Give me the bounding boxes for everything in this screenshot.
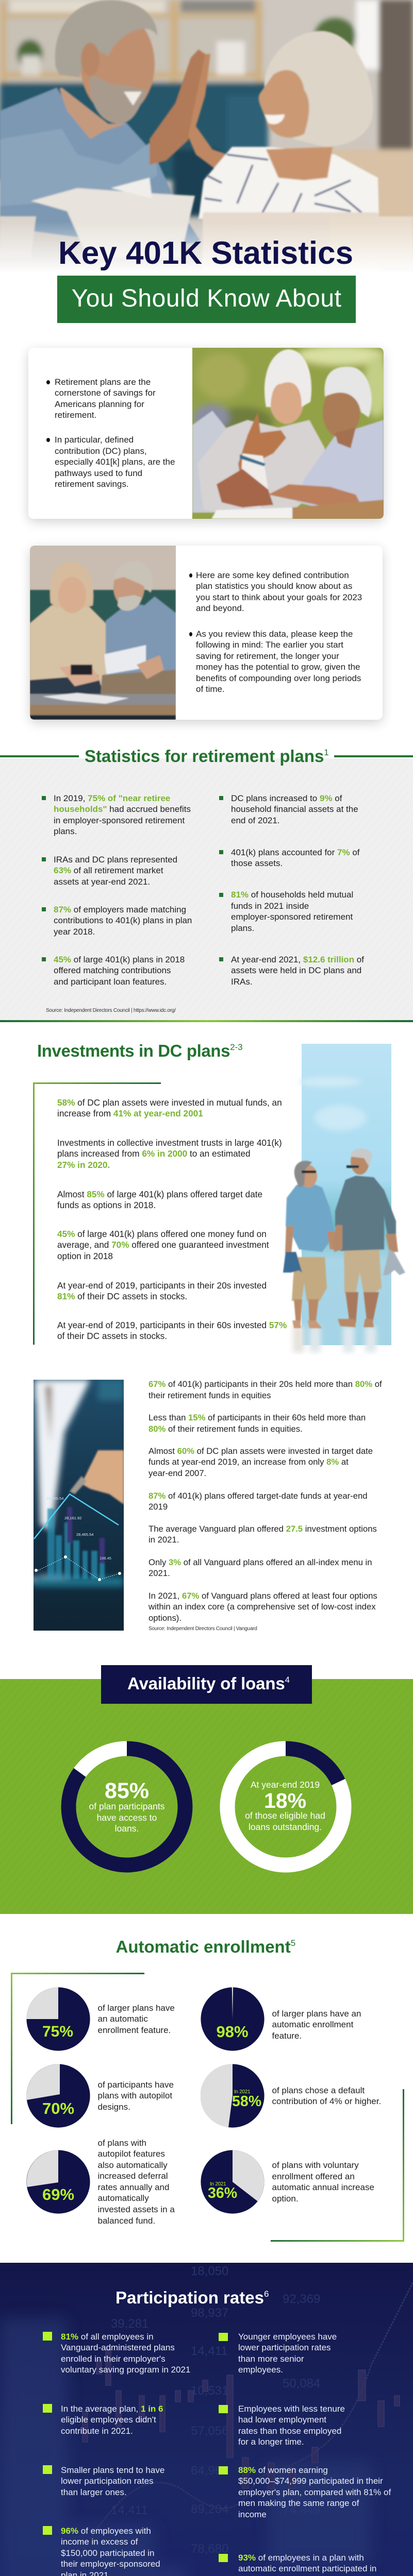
stat: participants in 20s equities: their retirement funds in equities [148, 1391, 271, 1400]
bullet text: keep in mind: of time. [196, 684, 225, 694]
callout: 18 percent had loans outstanding: of those eligible had [245, 1810, 325, 1821]
stat: younger employees: lower participation rates [238, 2343, 331, 2352]
stat: target date funds: Almost 85% of large 401(k) plans offered target date [57, 1189, 262, 1199]
stat: participants in 20s [57, 1280, 267, 1301]
stat: 96 percent high income: 96% of employees with [61, 2526, 151, 2536]
stat: 96 percent high income: their employer-sponsored [61, 2559, 160, 2569]
stat: 36 percent pie [200, 2150, 394, 2214]
stat: collective investment trusts [57, 1138, 282, 1170]
section heading: Automatic enrollment5 [115, 1937, 295, 1956]
callout: 85 percent have access: loans. [115, 1823, 139, 1834]
background: dark finance chart with couple photo: 74,849 [283, 2503, 320, 2517]
bracket decoration: bottom right [271, 2089, 404, 2242]
callout: 85 percent have access: of plan participants [89, 1801, 164, 1811]
section: investments in DC plans [33, 1041, 406, 1354]
stat: 36 percent pie: 36% [208, 2185, 237, 2201]
section heading: Investments in DC plans2-3 [37, 1041, 243, 1060]
stat: 1 in 6: eligible employees didn't [61, 2415, 156, 2425]
stat: 98 percent pie: 98% [216, 2023, 249, 2041]
stat: 98 percent pie: of larger plans have an [272, 2008, 361, 2019]
stat: target date funds: funds as options in 2018. [57, 1200, 156, 1210]
stat: collective investment trusts: Investments in collective investment trusts in large 401(k) [57, 1138, 282, 1148]
stat: 58 percent pie: In 2021 [234, 2089, 250, 2095]
background: dark finance chart with couple photo: 57,056 [191, 2424, 228, 2438]
stat: index core: options). [148, 1613, 181, 1623]
stat: 1 in 6: In the average plan, 1 in 6 [61, 2404, 163, 2413]
stat: household assets [219, 793, 358, 825]
stat: target date assets: Almost 60% of DC plan assets were invested in target date [148, 1446, 373, 1456]
stat: 96 percent high income: $150,000 participated in [61, 2548, 154, 2558]
stat: all-index menu: Only 3% of all Vanguard plans offered an all-index menu in [148, 1557, 372, 1567]
stat: younger employees: employees. [238, 2365, 283, 2375]
stat: participants in 60s: At year-end of 2019, participants in their 60s invested 57% [57, 1320, 287, 1330]
hero: photo, title and subtitle [0, 0, 413, 323]
stat: 93 percent automatic enrollment: 93% of employees in a plan with [238, 2552, 364, 2563]
stat: 93 percent automatic enrollment: automatic enrollment participated in [238, 2564, 376, 2573]
section: automatic enrollment [0, 1937, 413, 2244]
bullet text: defined contribution: retirement savings. [55, 479, 129, 489]
photo: hand drawing financial chart: 28,465.54 [76, 1532, 93, 1537]
stat: 69 percent pie: 69% [42, 2185, 74, 2204]
stat: 70 percent pie: of participants have [98, 2079, 174, 2090]
callout: 85 percent have access: 85% [105, 1778, 149, 1803]
stat: collective investment trusts: plans increased from 6% in 2000 to an estimated [57, 1148, 251, 1159]
stat: smaller plans: Smaller plans tend to have [61, 2465, 164, 2475]
background: dark finance chart with couple photo [0, 2263, 413, 2576]
section heading banner [101, 1665, 312, 1704]
photo: hand drawing financial chart [34, 1380, 124, 1631]
stat: 69 percent pie: also automatically [98, 2160, 168, 2170]
stat: 75 percent pie: 75% [42, 2023, 73, 2040]
stat: participants in 60s equities [148, 1413, 366, 1434]
woman's hand and arm [188, 54, 242, 178]
bullet text: keep in mind: following in mind: The earlier you start [196, 640, 343, 650]
stat: 69 percent pie: autopilot features [98, 2149, 165, 2159]
stat: 69 percent pie: invested assets in a [98, 2205, 175, 2214]
bullet text: defined contribution: In particular, defined [55, 435, 134, 445]
callout: 85 percent have access [89, 1778, 164, 1834]
stat: younger employees [238, 2331, 337, 2376]
background: dark finance chart with couple photo: 78,680 [191, 2542, 228, 2556]
photo: couple walking on beach [283, 1044, 406, 1354]
stat: 81 percent enrolled: Vanguard-administered plans [61, 2343, 175, 2352]
stat: 12.6 trillion: At year-end 2021, $12.6 trillion of [231, 954, 364, 964]
stat: 70 percent pie: plans with autopilot [98, 2091, 172, 2100]
stat: smaller plans: lower participation rates [61, 2476, 154, 2486]
stat: 81 percent enrolled: voluntary saving program in 2021 [61, 2365, 190, 2375]
stat: 75 percent pie: an automatic [98, 2014, 148, 2024]
stat: 12.6 trillion: IRAs. [231, 977, 253, 987]
stat: money fund: 45% of large 401(k) plans offered one money fund on [57, 1228, 267, 1239]
stat: 88 percent women: men making the same range of [238, 2498, 359, 2508]
woman [199, 147, 379, 219]
stat: target date funds [57, 1189, 262, 1210]
stat: 69 percent pie: automatically [98, 2193, 149, 2203]
bullet text: key plan statistics: plan statistics you should know about as [196, 581, 352, 591]
bullet text: key plan statistics: and beyond. [196, 603, 244, 613]
photo: couple with dog [192, 348, 384, 519]
stat: 69 percent pie: increased deferral [98, 2171, 168, 2181]
stat: 81 percent enrolled: enrolled in their employer's [61, 2354, 166, 2364]
photo: hand drawing financial chart: 198.45 [100, 1556, 111, 1561]
stat: mutual funds [219, 890, 353, 933]
stat: money fund: average, and 70% offered one guaranteed investment [57, 1240, 269, 1250]
source note: Source: Independent Directors Council | https://www.idc.org/ [46, 1008, 176, 1013]
bullet text: defined contribution [46, 435, 175, 489]
stat: younger employees: than more senior [238, 2354, 304, 2364]
stat: 401k share: 401(k) plans accounted for 7% of [231, 847, 360, 857]
bullet text: defined contribution: contribution (DC) plans, [55, 446, 147, 456]
stat: 58 percent pie: of plans chose a default [272, 2086, 365, 2095]
stat: target-date funds offered: 87% of 401(k) plans offered target-date funds at year-end [148, 1491, 368, 1500]
background: dark finance chart with couple photo: 89,204 [191, 2502, 228, 2516]
stat: less tenure: rates than those employed [238, 2426, 341, 2436]
bullet text: key plan statistics [189, 570, 362, 613]
background: dark finance chart with couple photo: 39,281 [111, 2317, 148, 2331]
stat: average Vanguard options [148, 1524, 377, 1545]
stat: less tenure: had lower employment [238, 2415, 326, 2425]
section heading banner: Availability of loans4 [127, 1674, 290, 1693]
stat: 69 percent pie [26, 2137, 176, 2227]
photo: hand drawing financial chart: 28,161.92 [64, 1516, 81, 1520]
callout: 18 percent had loans outstanding: loans outstanding. [249, 1822, 322, 1832]
stat: matching contributions: 87% of employers made matching [54, 905, 186, 914]
stat: 88 percent women: $50,000–$74,999 participated in their [238, 2476, 383, 2486]
stat: younger employees: Younger employees have [238, 2332, 337, 2341]
background: dark finance chart with couple photo: 98,937 [191, 2306, 228, 2320]
section: participation rates [0, 2263, 413, 2576]
stat: 75 percent pie: enrollment feature. [98, 2025, 171, 2035]
stat: target-date funds offered: 2019 [148, 1502, 168, 1512]
stat: 401k share: those assets. [231, 858, 283, 868]
stat: large plans [42, 954, 185, 987]
stat: 69 percent pie: balanced fund. [98, 2216, 155, 2226]
stat: mutual funds: 81% of households held mutual [231, 890, 353, 900]
stat: 36 percent pie: option. [272, 2194, 299, 2204]
stat: 1 in 6: contribute in 2021. [61, 2426, 133, 2436]
stat: large plans: offered matching contributions [54, 965, 171, 975]
callout: 18 percent had loans outstanding: 18% [264, 1789, 306, 1812]
stat: matching contributions [42, 905, 192, 937]
bullet text: defined contribution: especially 401[k] plans, are the [55, 457, 175, 467]
stat: smaller plans: than larger ones. [61, 2487, 127, 2497]
stat: near retiree households: in employer-sponsored retirement [54, 816, 185, 825]
stat: mutual funds: increase from 41% at year-end 2001 [57, 1108, 203, 1118]
stat: 36 percent pie: enrollment offered an [272, 2172, 355, 2181]
panel: intro card with couple reviewing documents [30, 546, 383, 720]
stat: participants in 20s: 81% of their DC assets in stocks. [57, 1291, 187, 1301]
stat: 12.6 trillion: assets were held in DC plans and [231, 965, 361, 975]
background: dark finance chart with couple photo: 14,411 [111, 2503, 148, 2517]
stat: 96 percent high income: income in excess of [61, 2537, 138, 2547]
stat: near retiree households: households" had accrued benefits [54, 804, 191, 814]
bullet text: retirement plans: retirement. [55, 410, 96, 420]
stat: 58 percent pie: contribution of 4% or higher. [272, 2096, 381, 2106]
bullet text: keep in mind: saving for retirement, the longer your [196, 651, 339, 661]
stat: 69 percent pie: of plans with [98, 2138, 146, 2147]
bullet text: keep in mind: benefits of compounding over long periods [196, 673, 361, 683]
stat: mutual funds: 58% of DC plan assets were invested in mutual funds, an [57, 1097, 282, 1108]
stat: large plans: and participant loan features. [54, 977, 167, 987]
stat: IRAs and DC plans: IRAs and DC plans represented [54, 854, 177, 865]
photo: hand drawing financial chart: 26,465.54 [46, 1496, 63, 1501]
background: dark finance chart with couple photo: 14,411 [191, 2344, 228, 2358]
man [0, 88, 201, 247]
laptop [203, 212, 379, 274]
stat: 88 percent women [238, 2465, 391, 2520]
stat: less tenure: for a longer time. [238, 2437, 304, 2447]
hero photo: retired couple high-five [0, 0, 413, 266]
stat: household assets: end of 2021. [231, 816, 280, 825]
stat: matching contributions: contributions to 401(k) plans in plan [54, 916, 192, 925]
stat: less tenure: Employees with less tenure [238, 2404, 345, 2413]
stat: collective investment trusts: 27% in 2020. [57, 1160, 110, 1170]
stat: household assets: household financial assets at the [231, 804, 358, 814]
stat: 88 percent women: employer's plan, compared with 81% of [238, 2487, 391, 2497]
bullet text: retirement plans: Retirement plans are the [55, 377, 151, 386]
stat: 58 percent pie: 58% [232, 2093, 261, 2110]
background: dark finance chart with couple photo: 50,084 [283, 2377, 320, 2391]
stat: 1 in 6 [61, 2403, 163, 2436]
stat: matching contributions: year 2018. [54, 927, 95, 937]
subtitle banner: You Should Know About [72, 285, 341, 312]
stat: 70 percent pie: 70% [42, 2099, 74, 2117]
stat: large plans: 45% of large 401(k) plans in 2018 [54, 954, 185, 964]
stat: 75 percent pie: of larger plans have [98, 2003, 175, 2012]
stat: money fund [57, 1228, 269, 1261]
stat: 98 percent pie [200, 1987, 391, 2051]
stat: participants in 60s [57, 1320, 287, 1341]
bullet text: key plan statistics: you start to think about your goals for 2023 [196, 592, 362, 602]
panel: intro card with dog photo [28, 348, 384, 519]
stat: target date assets [148, 1446, 373, 1478]
donut chart: 18 percent [220, 1741, 352, 1872]
stat: participants in 60s: of their DC assets in stocks. [57, 1331, 167, 1341]
stat: 36 percent pie: In 2021 [210, 2181, 226, 2187]
papers [31, 188, 195, 258]
photo: couple reviewing paperwork [30, 546, 176, 720]
stat: all-index menu [148, 1557, 372, 1578]
stat: 88 percent women: income [238, 2510, 267, 2519]
callout: 85 percent have access: have access to [97, 1812, 157, 1823]
callout: 18 percent had loans outstanding: At year-end 2019 [251, 1780, 320, 1790]
stat: all-index menu: 2021. [148, 1568, 170, 1578]
bracket decoration [33, 1082, 161, 1345]
background: dark finance chart with couple photo: 64,96 [191, 2464, 222, 2478]
stat: household assets: DC plans increased to 9% of [231, 793, 342, 803]
stat: money fund: option in 2018 [57, 1251, 113, 1261]
section: statistics for retirement plans [0, 747, 413, 1022]
stat: participants in 60s equities: Less than 15% of participants in their 60s held more than [148, 1413, 366, 1422]
stat: mutual funds: funds in 2021 inside [231, 901, 309, 911]
stat: 69 percent pie: rates annually and [98, 2182, 169, 2192]
stat: 96 percent high income [61, 2526, 160, 2576]
bullet text: keep in mind [189, 629, 361, 694]
bracket decoration: top left [11, 1973, 144, 2124]
title: Key 401K Statistics [58, 235, 353, 271]
donut chart: 85 percent [61, 1741, 193, 1872]
background: dark finance chart with couple photo: 92,369 [283, 2292, 320, 2306]
stat: 75 percent pie [26, 1987, 176, 2051]
bullet text: retirement plans: Americans planning for [55, 399, 144, 409]
stat: 70 percent pie [26, 2064, 176, 2128]
stat: 401k share [219, 847, 360, 868]
stat: index core: In 2021, 67% of Vanguard plans offered at least four options [148, 1591, 377, 1600]
stat: participants in 60s equities: 80% of their retirement funds in equities. [148, 1424, 303, 1434]
stat: 98 percent pie: feature. [272, 2031, 302, 2041]
stat: near retiree households: plans. [54, 826, 77, 836]
section heading: Statistics for retirement plans1 [85, 747, 329, 766]
stat: average Vanguard options: The average Vanguard plan offered 27.5 investment options [148, 1524, 377, 1533]
stat: 81 percent enrolled [61, 2331, 190, 2376]
stat: 36 percent pie: automatic annual increase [272, 2182, 374, 2192]
callout: 18 percent had loans outstanding [245, 1780, 325, 1832]
stat: near retiree households: In 2019, 75% of "near retiree [54, 793, 170, 803]
stat: IRAs and DC plans: 63% of all retirement market [54, 866, 163, 875]
section heading: Participation rates6 [115, 2288, 269, 2307]
bullet text: keep in mind: As you review this data, please keep the [196, 629, 353, 639]
stat: participants in 20s equities [148, 1379, 382, 1400]
stat: 98 percent pie: automatic enrollment [272, 2020, 353, 2029]
stat: index core [148, 1591, 377, 1623]
stat: target-date funds offered [148, 1491, 368, 1512]
stat: mutual funds: employer-sponsored retirement [231, 912, 353, 922]
stat: mutual funds [57, 1097, 282, 1118]
bullet text: retirement plans: cornerstone of savings for [55, 388, 156, 398]
stat: target date assets: year-end 2007. [148, 1468, 206, 1478]
man's hand [150, 49, 205, 165]
subtitle banner [57, 276, 356, 323]
stat: 93 percent automatic enrollment [238, 2552, 387, 2576]
background: dark finance chart with couple photo: 10,531 [191, 2384, 228, 2398]
stat: 88 percent women: 88% of women earning [238, 2465, 328, 2475]
stat: 36 percent pie: of plans with voluntary [272, 2160, 359, 2170]
stat: target date assets: funds at year-end 2019, an increase from only 8% at [148, 1457, 349, 1467]
stat: less tenure [238, 2403, 345, 2448]
stat: smaller plans [61, 2465, 164, 2498]
stat: IRAs and DC plans: assets at year-end 2021. [54, 877, 150, 887]
bullet text: key plan statistics: Here are some key defined contribution [196, 570, 349, 580]
stat: 58 percent pie [200, 2064, 404, 2128]
stat: 12.6 trillion [219, 954, 364, 987]
background: dark finance chart with couple photo: 18,050 [191, 2264, 228, 2278]
stat: participants in 20s equities: 67% of 401(k) participants in their 20s held more than 80% of [148, 1379, 382, 1389]
source note: Source: Independent Directors Council | Vanguard [148, 1626, 257, 1632]
stat: average Vanguard options: in 2021. [148, 1535, 179, 1545]
stat: mutual funds: plans. [231, 923, 254, 933]
bullet text: defined contribution: pathways used to fund [55, 468, 142, 478]
stat: 81 percent enrolled: 81% of all employees in [61, 2332, 154, 2341]
stat: near retiree households [42, 793, 191, 836]
stat: participants in 20s: At year-end of 2019, participants in their 20s invested [57, 1280, 267, 1290]
stat: index core: within an index core (a comprehensive set of low-cost index [148, 1602, 376, 1612]
panel: investments continued [34, 1379, 382, 1632]
stat: IRAs and DC plans [42, 854, 177, 887]
bullet text: keep in mind: money has the potential to grow, given the [196, 662, 360, 672]
bullet text: retirement plans [46, 377, 156, 420]
stat: 70 percent pie: designs. [98, 2102, 130, 2112]
section: availability of loans [0, 1665, 413, 1914]
